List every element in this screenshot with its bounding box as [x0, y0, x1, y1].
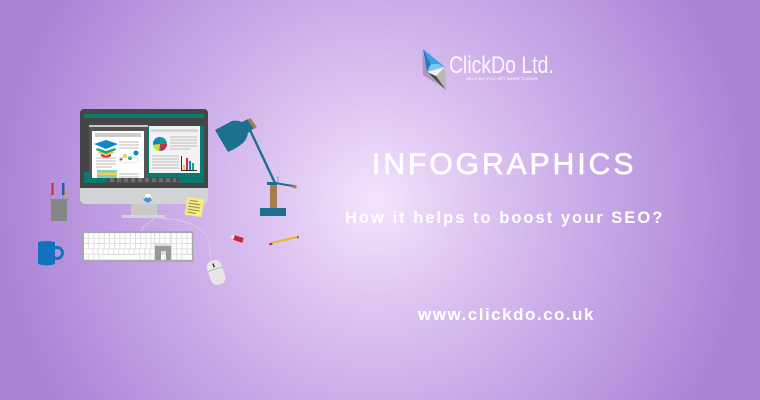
icon: USB stick	[230, 234, 244, 243]
keyboard and mouse cables	[141, 218, 211, 260]
dock icons	[110, 178, 176, 182]
right document	[149, 126, 200, 173]
icon: pencil cup	[50, 183, 68, 221]
logo wordmark: ClickDo Ltd.	[449, 52, 554, 79]
icon: pencil	[269, 236, 299, 245]
icon: coffee mug	[38, 241, 62, 266]
subtitle: How it helps to boost your SEO?	[345, 209, 664, 227]
logo tagline: HELPING YOU GET MORE CLICKS	[466, 76, 537, 81]
website URL: www.clickdo.co.uk	[418, 305, 595, 324]
icon: keyboard	[82, 231, 194, 262]
icon: mouse	[205, 258, 227, 287]
icon: desk lamp	[215, 119, 296, 216]
title: INFOGRAPHICS	[372, 148, 636, 181]
left document	[89, 125, 148, 178]
icon: monitor	[80, 109, 208, 218]
icon: sticky note	[185, 197, 204, 217]
icon: ClickDo logo arrow	[422, 49, 448, 91]
